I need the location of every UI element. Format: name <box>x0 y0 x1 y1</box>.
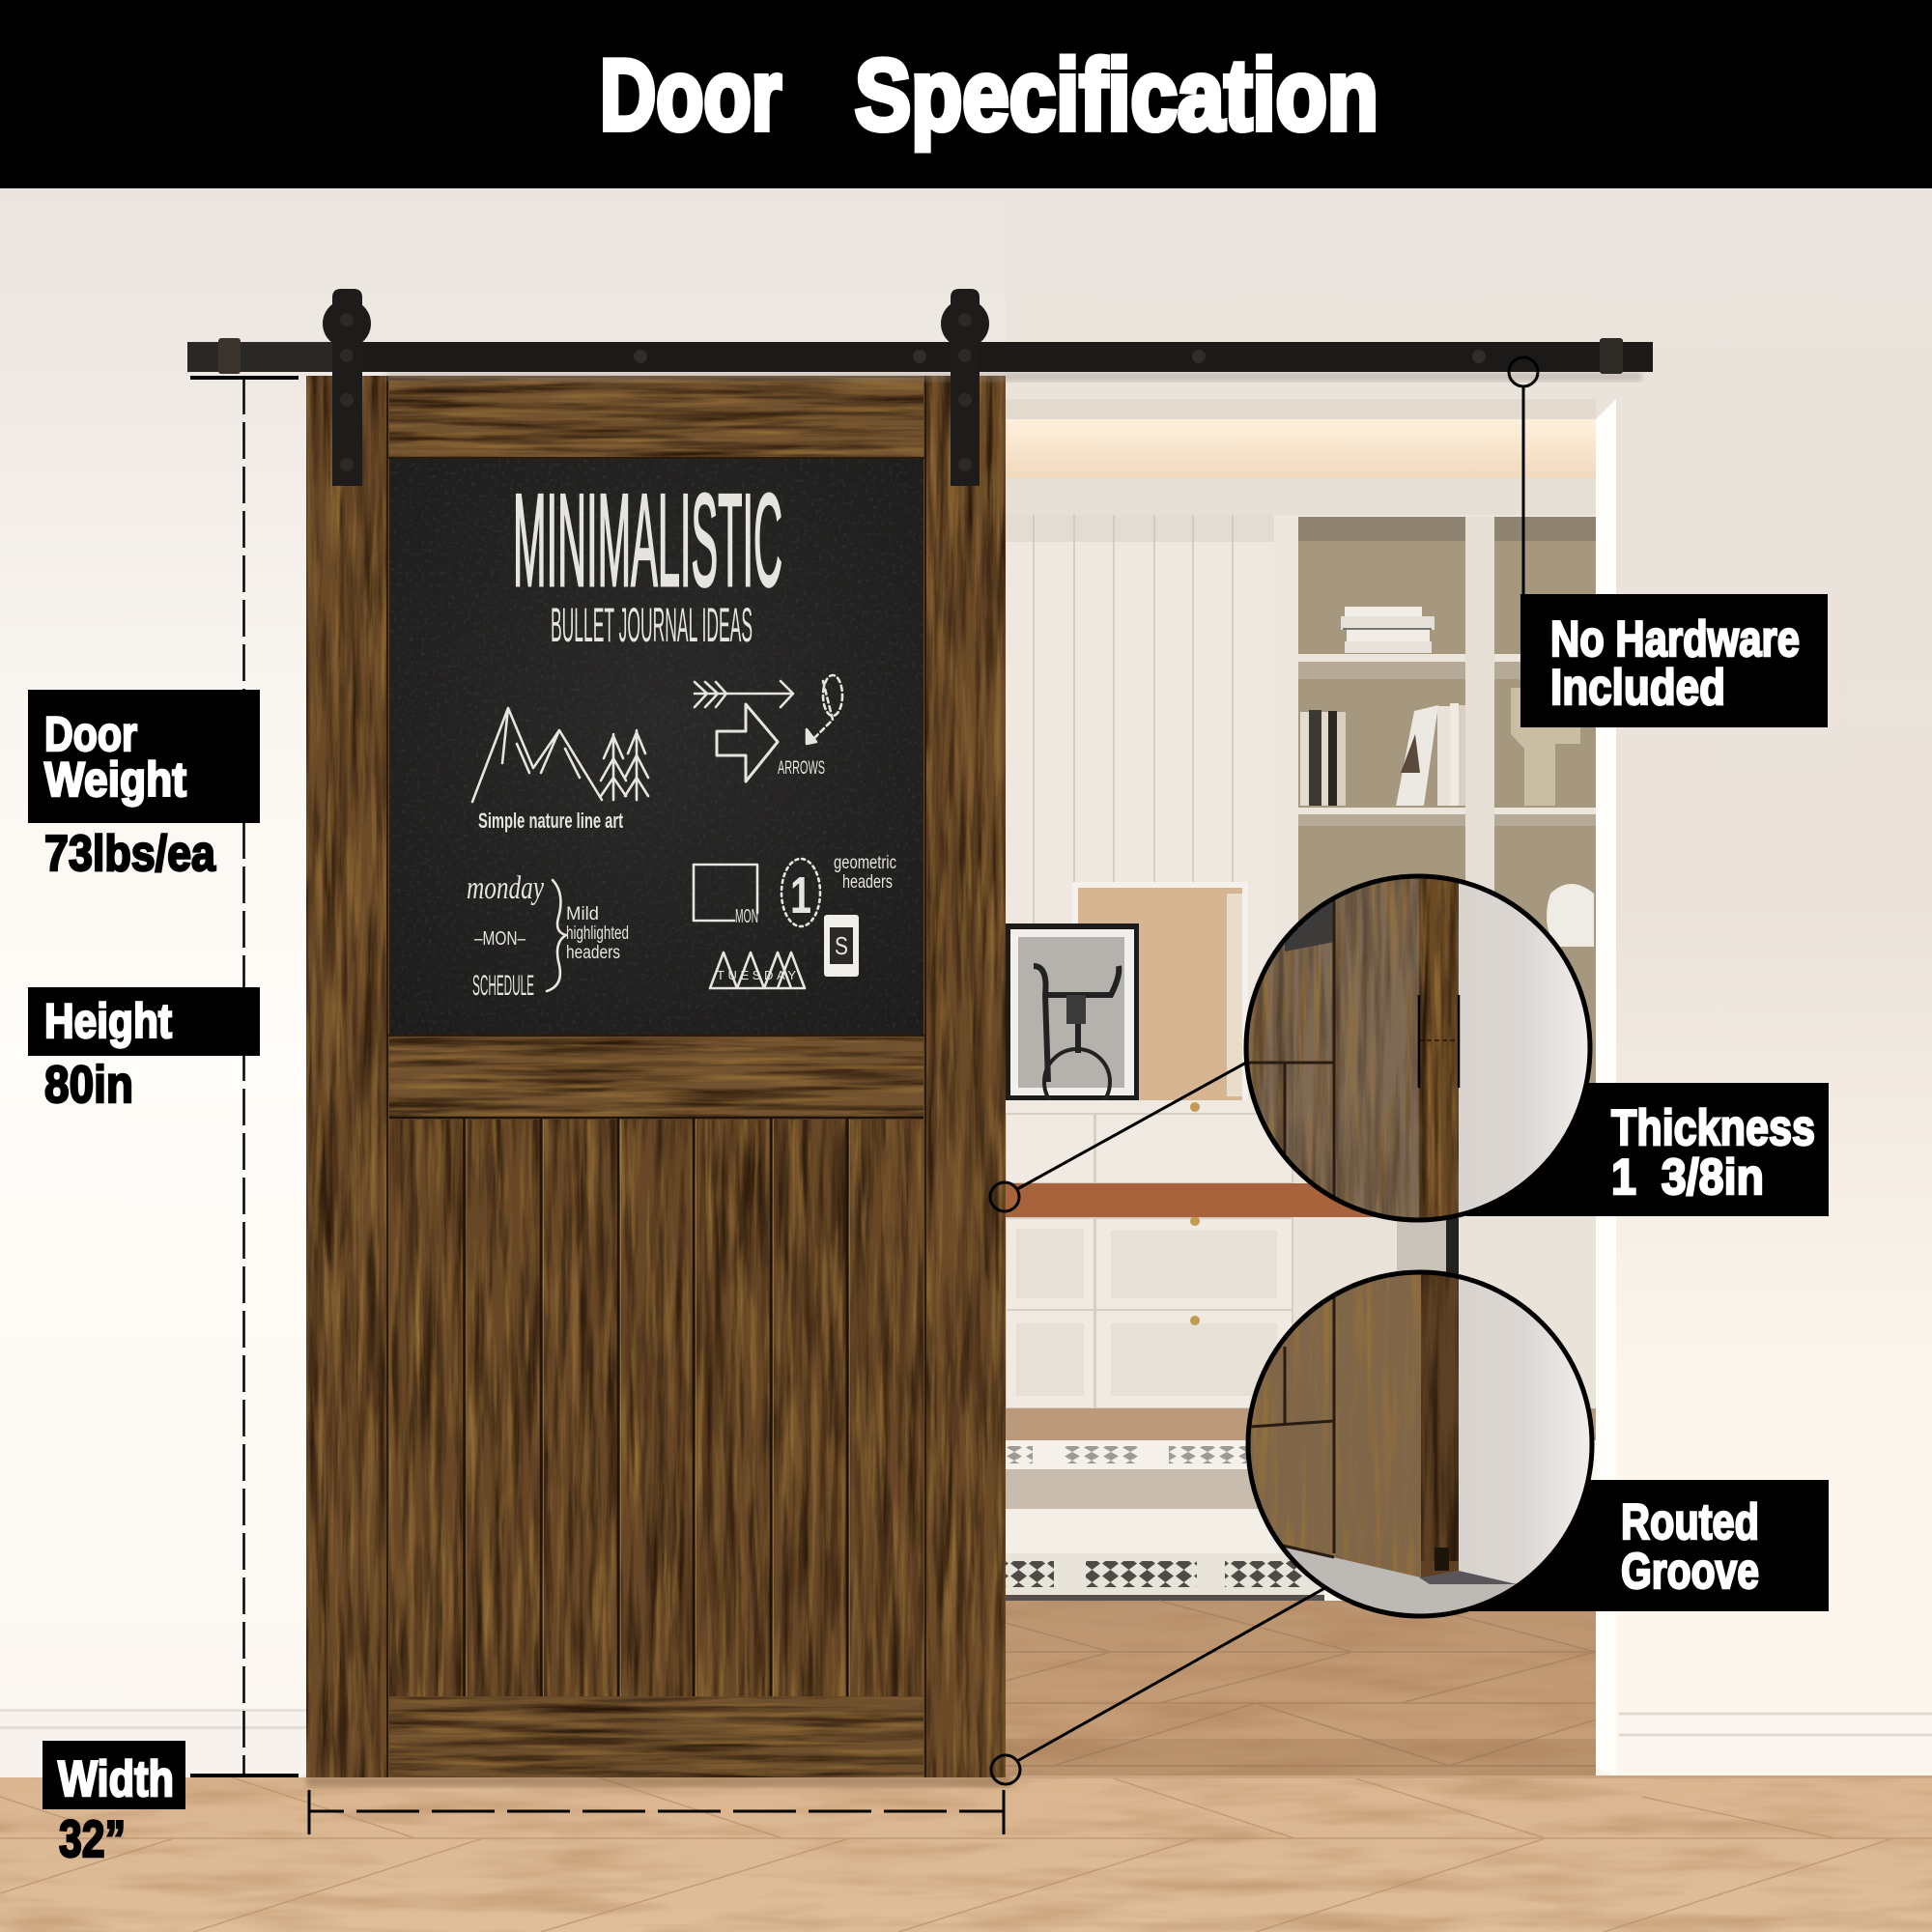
right stile <box>925 376 1006 1777</box>
panelled wall <box>1006 515 1274 1100</box>
left stile <box>306 376 387 1777</box>
callout box: no hardware included: No Hardware <box>1550 611 1800 668</box>
callout box: routed groove: Groove <box>1621 1544 1759 1600</box>
chalk geometric headers: headers <box>842 872 893 893</box>
title text: Specification <box>855 40 1378 152</box>
right baseboard <box>1619 1711 1932 1777</box>
door weight value: 73lbs/ea <box>44 826 216 882</box>
chalk arrows <box>695 675 842 781</box>
ceiling glow <box>1006 419 1596 478</box>
title text: Door <box>600 40 781 152</box>
main floor <box>0 1777 1932 1932</box>
height value: 80in <box>44 1056 133 1114</box>
chalk schedule list: monday <box>467 870 545 906</box>
callout box: routed groove: Routed <box>1621 1494 1759 1550</box>
callout box: height <box>28 987 260 1056</box>
callout box: no hardware included: Included <box>1550 660 1725 716</box>
left stopper <box>218 338 241 374</box>
chalk geometric headers: geometric <box>834 853 896 873</box>
chalk geometric headers: S <box>835 931 848 960</box>
callout box: thickness: Thickness <box>1611 1100 1815 1156</box>
vertical plank panel <box>389 1118 923 1696</box>
title text <box>600 40 1378 152</box>
chalkboard panel: BULLET JOURNAL IDEAS <box>551 598 753 652</box>
barn door track rail <box>187 338 1653 374</box>
chalk geometric headers: 1 <box>790 867 811 924</box>
callout box: door weight <box>28 690 260 823</box>
crown moulding <box>1006 478 1596 515</box>
right door hanger <box>941 289 989 486</box>
stacked books <box>1341 607 1435 653</box>
soffit <box>1006 399 1596 419</box>
rail bolts <box>634 350 1486 363</box>
chalk geometric headers: TUESDAY <box>717 968 796 982</box>
right section floor edge <box>1006 1776 1932 1778</box>
callout box: door weight: Weight <box>44 753 186 807</box>
bottom rail <box>389 1697 923 1777</box>
callout box: width: Width <box>58 1751 174 1807</box>
vase <box>1547 884 1594 947</box>
barn door: MINIMALISTIC <box>513 467 782 613</box>
chalk geometric headers <box>694 853 896 988</box>
left door hanger <box>323 289 371 486</box>
callout box: door weight: Door <box>44 707 137 761</box>
wooden countertop <box>1006 1183 1392 1217</box>
middle rail <box>389 1037 923 1118</box>
chalk schedule list: –MON– <box>474 928 526 950</box>
beige framed art <box>1072 882 1248 1100</box>
sculpture <box>1511 688 1580 806</box>
chalk mountains and trees <box>472 708 648 802</box>
magnifier circle: routed groove detail <box>1246 1271 1594 1623</box>
chalk schedule list: headers <box>566 943 620 963</box>
cabinets <box>1006 1100 1596 1413</box>
white door jamb <box>1596 399 1616 1777</box>
door edge strip between circles <box>1397 1218 1459 1278</box>
door opening: room interior <box>1006 399 1596 1777</box>
right stopper <box>1600 338 1623 374</box>
pointer: thickness <box>990 1063 1246 1211</box>
chalk schedule list <box>467 870 629 1002</box>
upright books <box>1300 710 1346 806</box>
callout box: width <box>43 1741 185 1809</box>
callout box: no hardware included <box>1520 594 1828 727</box>
pointer: no hardware included <box>1509 357 1538 594</box>
chalk geometric headers: MON <box>735 906 758 927</box>
chalk arrows caption: ARROWS <box>778 758 825 779</box>
callout box: thickness <box>1466 1083 1829 1216</box>
width dimension line <box>309 1790 1004 1834</box>
callout box: thickness: 1 3/8in <box>1611 1150 1764 1206</box>
callout box: routed groove <box>1468 1480 1829 1611</box>
chalk nature caption: Simple nature line art <box>478 809 623 833</box>
leaning books <box>1396 703 1485 806</box>
left baseboard <box>0 1709 306 1777</box>
rail shadow <box>386 372 1642 382</box>
top rail <box>389 378 923 458</box>
barn door <box>306 376 1006 1777</box>
pointer: routed groove <box>991 1586 1328 1784</box>
door shadow <box>306 1776 1011 1787</box>
chalk schedule list: SCHEDULE <box>472 970 534 1002</box>
height dimension line <box>190 378 298 1776</box>
chalk schedule list: highlighted <box>566 923 629 944</box>
chalkboard panel <box>389 458 923 1036</box>
width value: 32” <box>59 1810 126 1868</box>
magnifier circle: door thickness detail <box>1246 875 1594 1223</box>
callout box: height: Height <box>44 994 172 1048</box>
black framed bicycle photo <box>1006 923 1139 1115</box>
door base <box>306 376 1006 1777</box>
bookshelf <box>1274 515 1596 1114</box>
interior floor and rugs <box>1006 1408 1596 1777</box>
chalk schedule list: Mild <box>566 904 599 924</box>
title bar <box>0 0 1932 188</box>
